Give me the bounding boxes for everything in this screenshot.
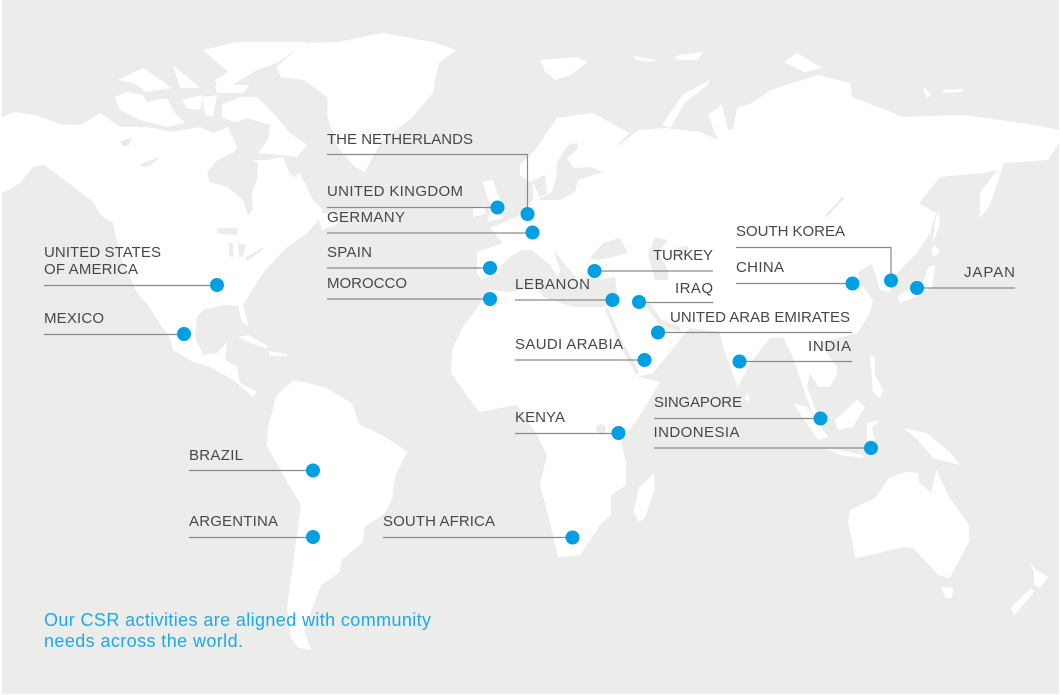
location: United Arab Emirates: UNITED ARAB EMIRATES — [670, 309, 850, 326]
location: Spain: SPAIN — [327, 244, 372, 261]
location: Mexico: MEXICO — [44, 310, 104, 327]
location: The Netherlands — [327, 131, 534, 221]
location: Brazil — [189, 447, 320, 478]
landmass: North America — [2, 42, 337, 397]
location: South Africa: SOUTH AFRICA — [383, 513, 495, 530]
location: India: INDIA — [808, 338, 851, 355]
location: Germany — [327, 209, 540, 240]
location: Iraq — [632, 280, 713, 309]
caption text: needs across the world. — [44, 631, 243, 651]
location: Saudi Arabia: SAUDI ARABIA — [515, 336, 623, 353]
caption text: Our CSR activities are aligned with community — [44, 610, 431, 630]
location: Mexico — [44, 310, 191, 341]
caption text — [44, 610, 431, 651]
location: United States of America: UNITED STATES — [44, 244, 161, 261]
location: The Netherlands: THE NETHERLANDS — [327, 131, 473, 148]
location: Argentina: ARGENTINA — [189, 513, 278, 530]
location: Singapore: SINGAPORE — [654, 394, 742, 411]
location: United Kingdom — [327, 183, 504, 214]
location: Iraq: IRAQ — [675, 280, 713, 297]
location: Lebanon: LEBANON — [515, 276, 590, 293]
location: Singapore — [654, 394, 828, 426]
location: China — [736, 259, 860, 290]
location: China: CHINA — [736, 259, 784, 276]
location: United Arab Emirates — [651, 309, 852, 340]
location: Turkey — [588, 247, 713, 278]
location: Morocco: MOROCCO — [327, 275, 407, 292]
location: Brazil: BRAZIL — [189, 447, 243, 464]
location: Saudi Arabia — [515, 336, 652, 367]
location: Germany: GERMANY — [327, 209, 405, 226]
location: Kenya: KENYA — [515, 409, 565, 426]
location: United States of America — [44, 244, 224, 292]
location: Argentina — [189, 513, 320, 544]
landmass: Australasia, Madagascar and Arctic islands — [540, 52, 1048, 615]
location: Spain — [327, 244, 497, 275]
inland seas and bays — [120, 137, 843, 434]
location: Japan — [910, 264, 1015, 295]
location: South Korea: SOUTH KOREA — [736, 223, 845, 240]
location: South Africa — [383, 513, 580, 544]
location: Turkey: TURKEY — [653, 247, 713, 264]
location: United States of America: OF AMERICA — [44, 261, 138, 278]
location: Lebanon — [515, 276, 620, 307]
landmass: Eurasia and Africa — [451, 75, 1059, 557]
landmass: Greenland and South America — [267, 33, 456, 650]
location: Indonesia — [654, 424, 878, 455]
location: United Kingdom: UNITED KINGDOM — [327, 183, 463, 200]
landmass: Asian, Pacific and European islands — [473, 180, 940, 458]
location: Morocco — [327, 275, 497, 306]
location: Japan: JAPAN — [964, 264, 1015, 281]
location: Kenya — [515, 409, 626, 440]
location: South Korea — [736, 223, 898, 288]
location: Indonesia: INDONESIA — [654, 424, 740, 441]
location: India — [732, 338, 852, 368]
